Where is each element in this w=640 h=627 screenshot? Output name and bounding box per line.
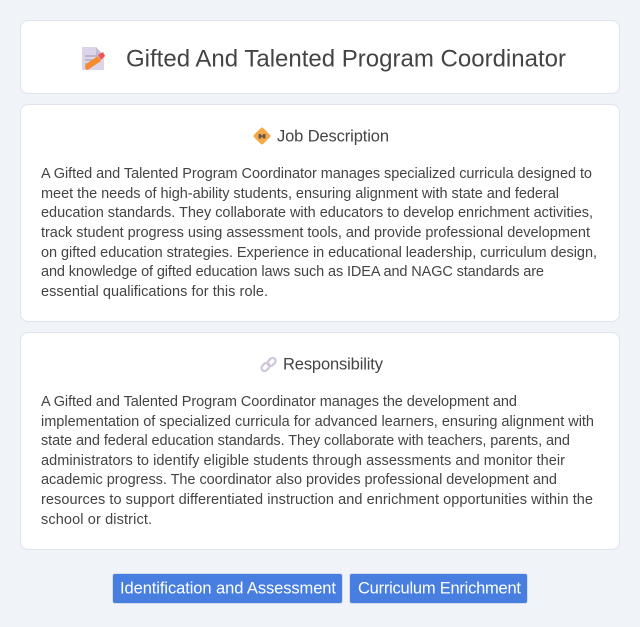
text block: responsibility: school or district.: [41, 512, 152, 528]
text block: responsibility: academic progress. The coordinator also provides professional development and: [41, 472, 557, 488]
text block: responsibility: resources to support differentiated instruction and enrichment opportunities within the: [41, 492, 593, 508]
text block: responsibility: state and federal education standards. They collaborate with teachers, parents, and: [41, 433, 570, 449]
tag: curriculum enrichment: Curriculum Enrichment: [358, 580, 521, 598]
text block: responsibility: administrators to identify eligible students through assessments and monitor their: [41, 453, 565, 469]
tag: identification and assessment: Identification and Assessment: [120, 580, 336, 598]
text block: job description: meet the needs of high-ability students, ensuring alignment with state and federal: [41, 186, 559, 202]
text block: job description: essential qualifications for this role.: [41, 284, 268, 300]
text block: job description: education standards. They collaborate with educators to develop enrichment activities,: [41, 205, 593, 221]
text block: responsibility: A Gifted and Talented Program Coordinator manages the development and: [41, 394, 517, 410]
heading: responsibility: Responsibility: [283, 356, 384, 374]
tag: curriculum enrichment: [350, 574, 527, 603]
text block: job description: track student progress using assessment tools, and provide professional development: [41, 225, 590, 241]
panel: title: [20, 20, 620, 94]
text block: job description: and knowledge of gifted education laws such as IDEA and NAGC standards are: [41, 264, 544, 280]
icon: document with pencil: [82, 47, 105, 70]
text block: responsibility: [41, 394, 594, 528]
icon: orange diamond sign: [253, 127, 271, 145]
heading: job description: Job Description: [277, 128, 389, 146]
text block: job description: on gifted education strategies. Experience in educational leadership, curriculum design,: [41, 245, 597, 261]
icon: chain link: [260, 357, 277, 372]
text block: job description: A Gifted and Talented Program Coordinator manages specialized curricula designed to: [41, 166, 592, 182]
text block: job description: [41, 166, 597, 300]
tag: identification and assessment: [113, 574, 342, 603]
panel: responsibility: [20, 332, 620, 550]
panel: job description: [20, 104, 620, 322]
title text: Gifted And Talented Program Coordinator: [126, 46, 566, 72]
text block: responsibility: implementation of specialized curricula for advanced learners, ensuring alignment with: [41, 414, 594, 430]
